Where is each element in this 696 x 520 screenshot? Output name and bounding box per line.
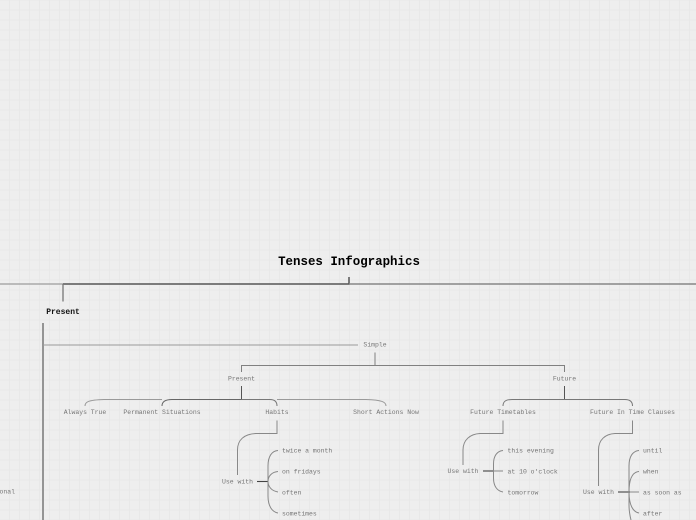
label: Always True: Always True [64,409,106,416]
main horizontal connector [0,277,696,302]
bracket: Clauses expressions [618,450,639,520]
heading: Present: Present [46,308,80,317]
label: at 10 o'clock: at 10 o'clock [508,468,558,476]
title: Tenses Infographics [278,255,420,269]
bracket: Timetables expressions [483,450,503,492]
label: until: until [643,448,662,454]
label: on fridays: on fridays [282,468,321,476]
label: Use with (Habits): Use with [222,478,253,486]
label: Future In Time Clauses: Future In Time Clauses [590,409,675,416]
label: sometimes: sometimes [282,510,317,518]
present trunk line [42,323,44,520]
connector to Simple [43,344,358,346]
label: after: after [643,510,662,518]
label: as soon as: as soon as [643,490,682,496]
label: this evening: this evening [508,448,554,454]
bracket: Habits expressions [257,450,278,513]
connector: Future In Time Clauses to Use with [598,420,632,486]
label: Permanent Situations: Permanent Situations [123,409,201,416]
label: Simple: Simple [363,342,387,348]
connector: Simple to Present and Future [242,352,564,372]
label: twice a month: twice a month [282,448,332,454]
connector: Future Timetables to Use with [463,420,503,465]
label: Present: Present [228,376,255,382]
connector: Present branches [85,386,386,406]
label: Future Timetables: Future Timetables [470,409,536,416]
label: Habits: Habits [265,409,289,416]
label: Use with (Timetables): Use with [448,468,479,475]
label: often: often [282,490,301,496]
label: Use with (Clauses): Use with [583,489,614,496]
label: Short Actions Now: Short Actions Now [353,409,419,416]
connector: Habits to Use with [238,420,277,475]
label: when: when [643,468,659,476]
connector: Future branches [503,386,632,406]
label: Future: Future [553,376,576,382]
label: tomorrow: tomorrow [508,490,539,496]
